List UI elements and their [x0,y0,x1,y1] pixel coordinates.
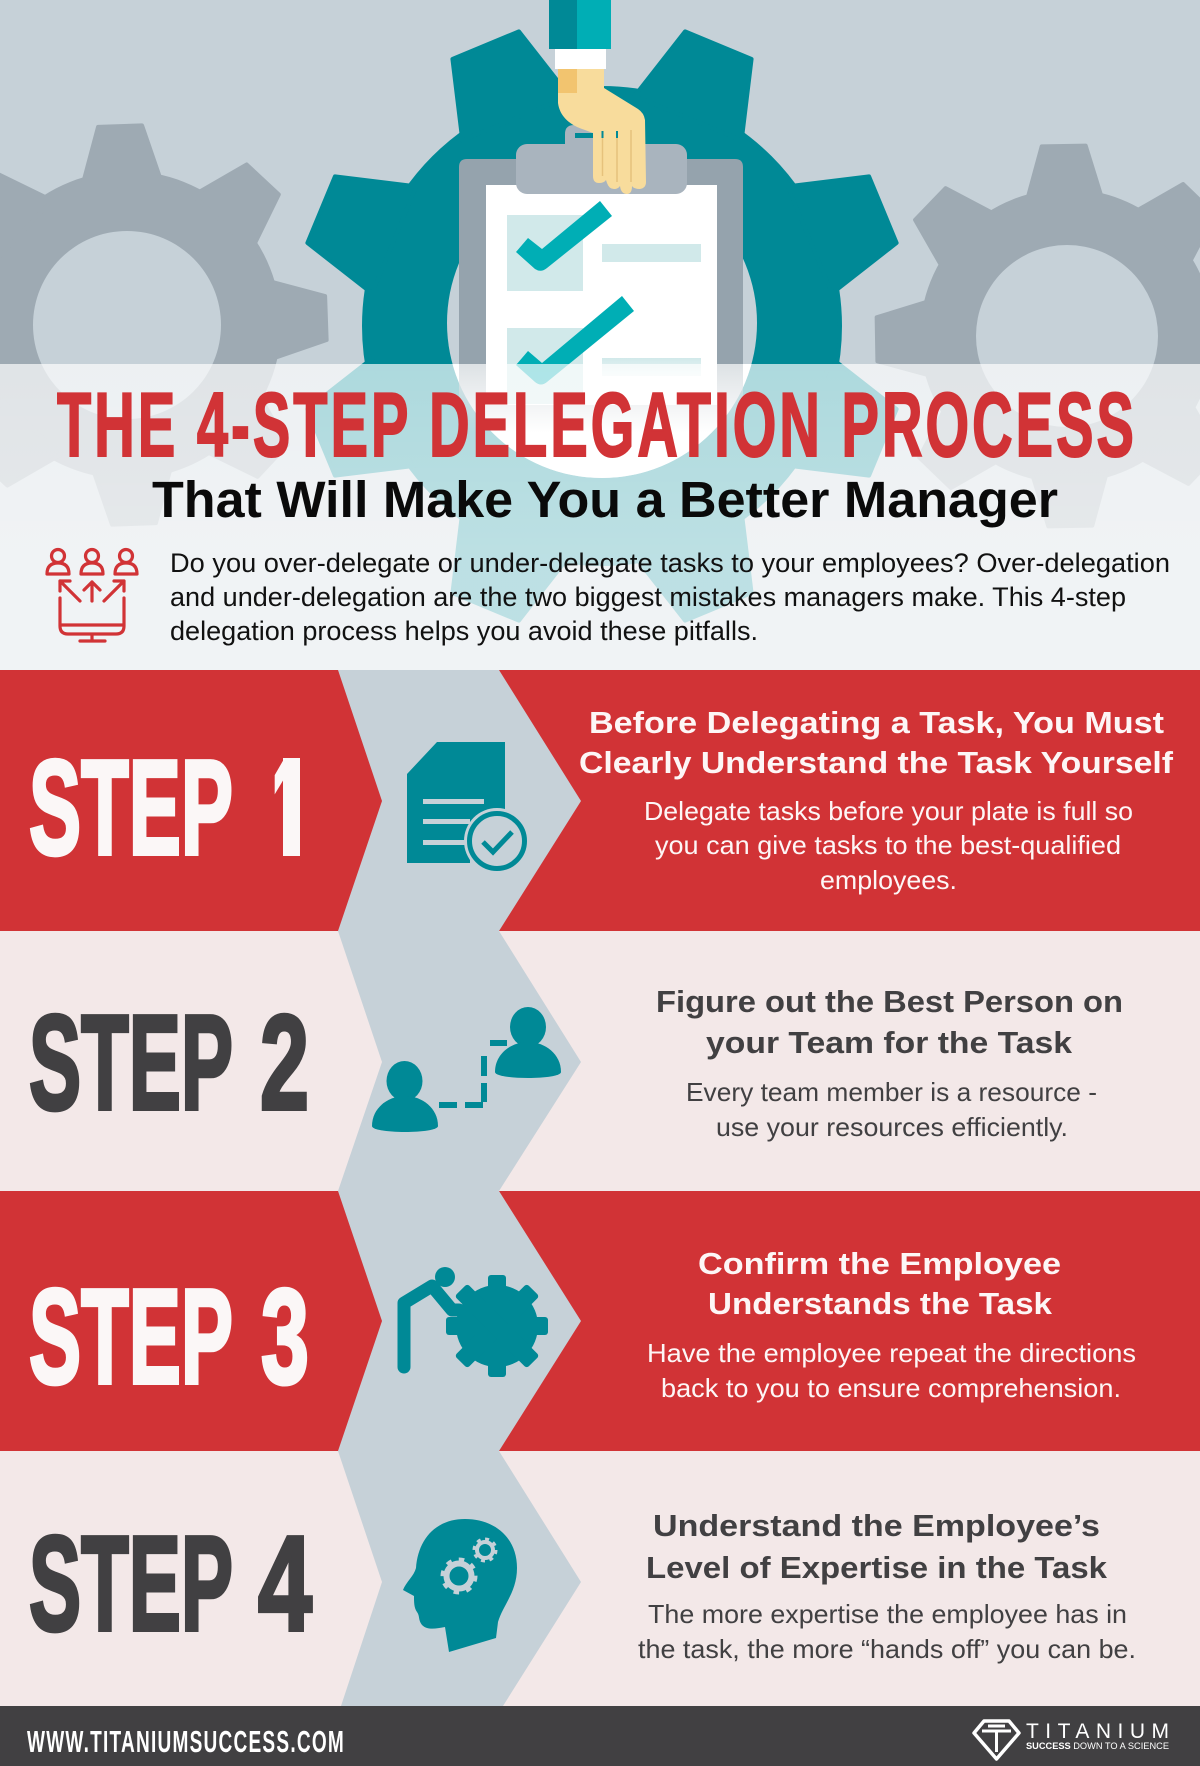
step 1 text: Before Delegating a Task, You Must [589,705,1164,740]
step 2 text: Figure out the Best Person on [656,984,1123,1019]
step 4 text: Level of Expertise in the Task [646,1550,1108,1585]
step 2 label: STEP [29,987,233,1138]
step 4 text [638,1508,1136,1664]
central teal gear [299,23,905,629]
icon: head with gears [403,1519,517,1652]
intro text: Do you over-delegate or under-delegate tasks to your employees? Over-delegation [170,548,1170,578]
step 2 text: use your resources efficiently. [716,1112,1068,1142]
step 3 text: Confirm the Employee [698,1246,1061,1281]
intro text: delegation process helps you avoid these pitfalls. [170,616,758,646]
icon: people and monitor [47,550,137,641]
step 2 label: 2 [260,987,309,1138]
intro text [170,548,1170,646]
step 4 text: The more expertise the employee has in [648,1599,1127,1629]
subtitle: That Will Make You a Better Manager [152,471,1058,528]
hand holding clipboard [549,0,646,194]
step 2 text: your Team for the Task [706,1025,1073,1060]
step 2 text [656,984,1123,1142]
icon: two people with dashed link [372,1007,561,1132]
icon: document with check [407,742,530,874]
logo: Titanium: SUCCESS DOWN TO A SCIENCE [1026,1741,1169,1751]
text: 1 [272,732,300,883]
step 1 text: Delegate tasks before your plate is full so [644,796,1133,826]
step 1 text: employees. [820,865,957,895]
step 2 text: Every team member is a resource - [686,1077,1097,1107]
step 1 text [579,705,1174,895]
zigzag chevron strip [338,670,581,1706]
step 1 text: you can give tasks to the best-qualified [655,830,1121,860]
hero background [0,0,1200,670]
step 3 text [647,1246,1136,1403]
footer bar [0,1706,1200,1766]
panel: step bands [0,670,1200,1706]
step 3 label: STEP [29,1261,233,1412]
step 1 text: Clearly Understand the Task Yourself [579,745,1174,780]
clipboard [459,125,743,432]
icon: person pushing gear [404,1267,548,1377]
logo: Titanium: TITANIUM [1026,1720,1169,1743]
step 4 label: 4 [258,1508,312,1659]
step 3 label: 3 [261,1261,309,1412]
intro text: and under-delegation are the two biggest mistakes managers make. This 4-step [170,582,1126,612]
step 3 text: back to you to ensure comprehension. [661,1373,1121,1403]
right grey gear [876,145,1200,527]
step 1 label: STEP [29,732,233,883]
step 4 label: STEP [29,1508,233,1659]
left grey gear [0,125,327,525]
footer url: WWW.TITANIUMSUCCESS.COM [27,1724,345,1759]
step 4 text: the task, the more “hands off” you can be. [638,1634,1136,1664]
logo: Titanium [974,1720,1169,1759]
step 3 text: Understands the Task [708,1286,1053,1321]
step 3 text: Have the employee repeat the directions [647,1338,1136,1368]
translucent title band [0,364,1200,670]
step 4 text: Understand the Employee’s [653,1508,1100,1543]
